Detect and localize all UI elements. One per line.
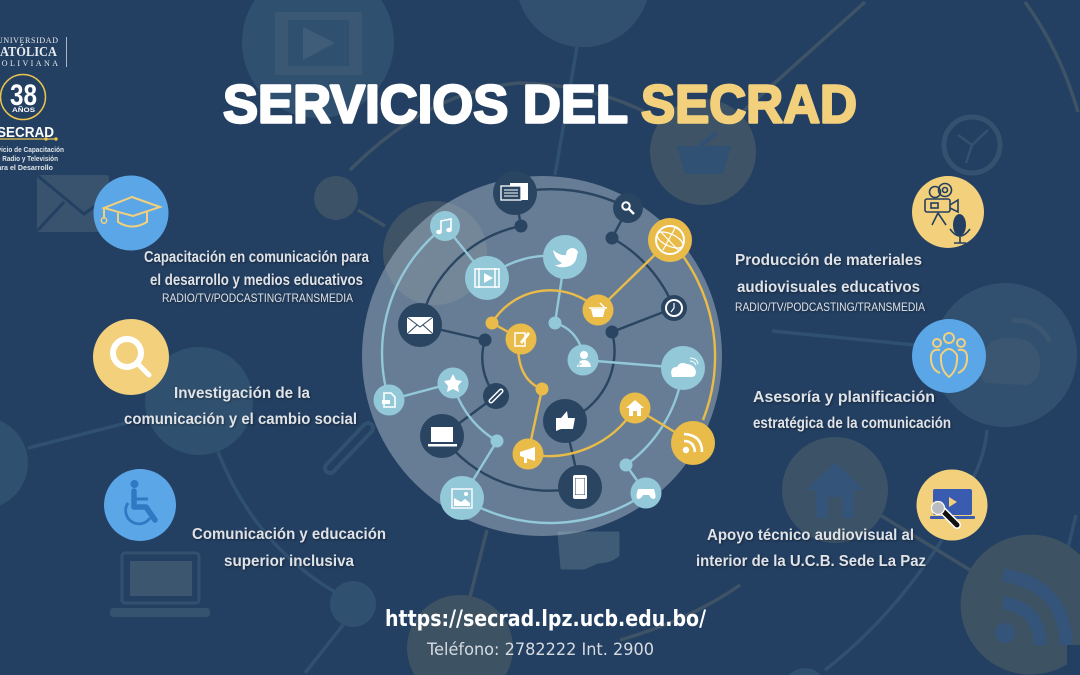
phone number: Teléfono: 2782222 Int. 2900 [426,640,654,660]
central network diagram [362,171,722,536]
icon: twitter bird [543,235,587,279]
service 1: capacitación [94,176,369,305]
icon: thumbs up [543,399,587,443]
logo: 38 años badge: 38 [10,79,37,112]
faded laptop [122,553,199,603]
icon: film [465,256,509,300]
text: inclusiva [192,526,386,570]
icon: clock [661,295,687,321]
text: inclusiva: superior inclusiva [224,553,354,570]
icon: music [430,211,460,241]
icon: globe [648,218,692,262]
icon: people [912,319,986,393]
text: asesoría: estratégica de la comunicación [753,415,951,432]
text: investigación: Investigación de la [174,385,310,402]
icon: edit [506,324,536,354]
text: asesoría: Asesoría y planificación [753,389,935,406]
icon: document [374,384,404,416]
text: apoyo técnico: interior de la U.C.B. Sede La Paz [696,553,926,570]
website url: https://secrad.lpz.ucb.edu.bo/ [385,607,707,632]
faded cloud [978,338,1040,385]
icon: megaphone [512,438,544,470]
logo: Universidad Católica Boliviana / SECRAD [0,36,67,172]
logo: 38 años badge: AÑOS [12,105,36,114]
title: SERVICIOS DEL [223,74,628,134]
text: producción: Producción de materiales [735,252,922,269]
icon: envelope [398,303,442,347]
text: investigación: comunicación y el cambio social [124,411,357,428]
text: inclusiva: Comunicación y educación [192,526,386,543]
connector dots [478,220,632,472]
text: apoyo técnico [696,527,926,570]
faded rss [995,623,1015,643]
faded chain [330,428,368,468]
text: capacitación: Capacitación en comunicación para [144,249,369,266]
icon: chain link [483,383,509,409]
icon: cloud [661,346,705,390]
faded basket [677,146,731,174]
text: capacitación [144,249,369,305]
text: investigación [124,385,357,428]
text: capacitación: el desarrollo y medios educativos [150,272,363,289]
service 4: producción [735,176,984,314]
logo: tagline [0,145,64,172]
icon: video screen and microphone [916,470,988,540]
connecting lines [382,189,715,523]
service 6: apoyo técnico [696,470,988,570]
service 5: asesoría [753,319,986,432]
icon: chat [493,171,537,215]
icon: rss [671,421,715,465]
faded thumb under disc [559,533,618,568]
text: asesoría [753,389,951,432]
text: producción [735,252,925,314]
faded clock [944,117,1000,173]
icon: magnifier [93,319,169,395]
icon: basket [582,294,614,326]
logo: university name [0,36,58,68]
icon: search [613,193,643,223]
faded envelope [37,175,109,232]
logo: 38 años badge [0,74,46,120]
service 3: inclusiva [104,469,386,570]
text: capacitación: RADIO/TV/PODCASTING/TRANSMEDIA [162,291,353,305]
icon: smartphone [558,465,602,509]
faded film [275,12,362,75]
icon: film camera and microphone [912,176,984,248]
icon: graduation cap [94,176,168,250]
text: apoyo técnico: Apoyo técnico audiovisual al [707,527,914,544]
service 2: investigación [93,319,357,428]
icon: gamepad [630,478,662,508]
title: SECRAD [641,74,857,134]
icon: laptop [420,414,464,458]
icon: star [438,368,468,398]
icon: user [568,344,598,376]
icon: wheelchair [104,469,176,541]
icon: picture [440,476,484,520]
icon: house [620,392,650,424]
central disc [362,176,722,536]
title [223,74,857,134]
faded house [806,462,864,518]
text: producción: audiovisuales educativos [737,279,920,296]
text: producción: RADIO/TV/PODCASTING/TRANSMEDIA [735,300,925,314]
